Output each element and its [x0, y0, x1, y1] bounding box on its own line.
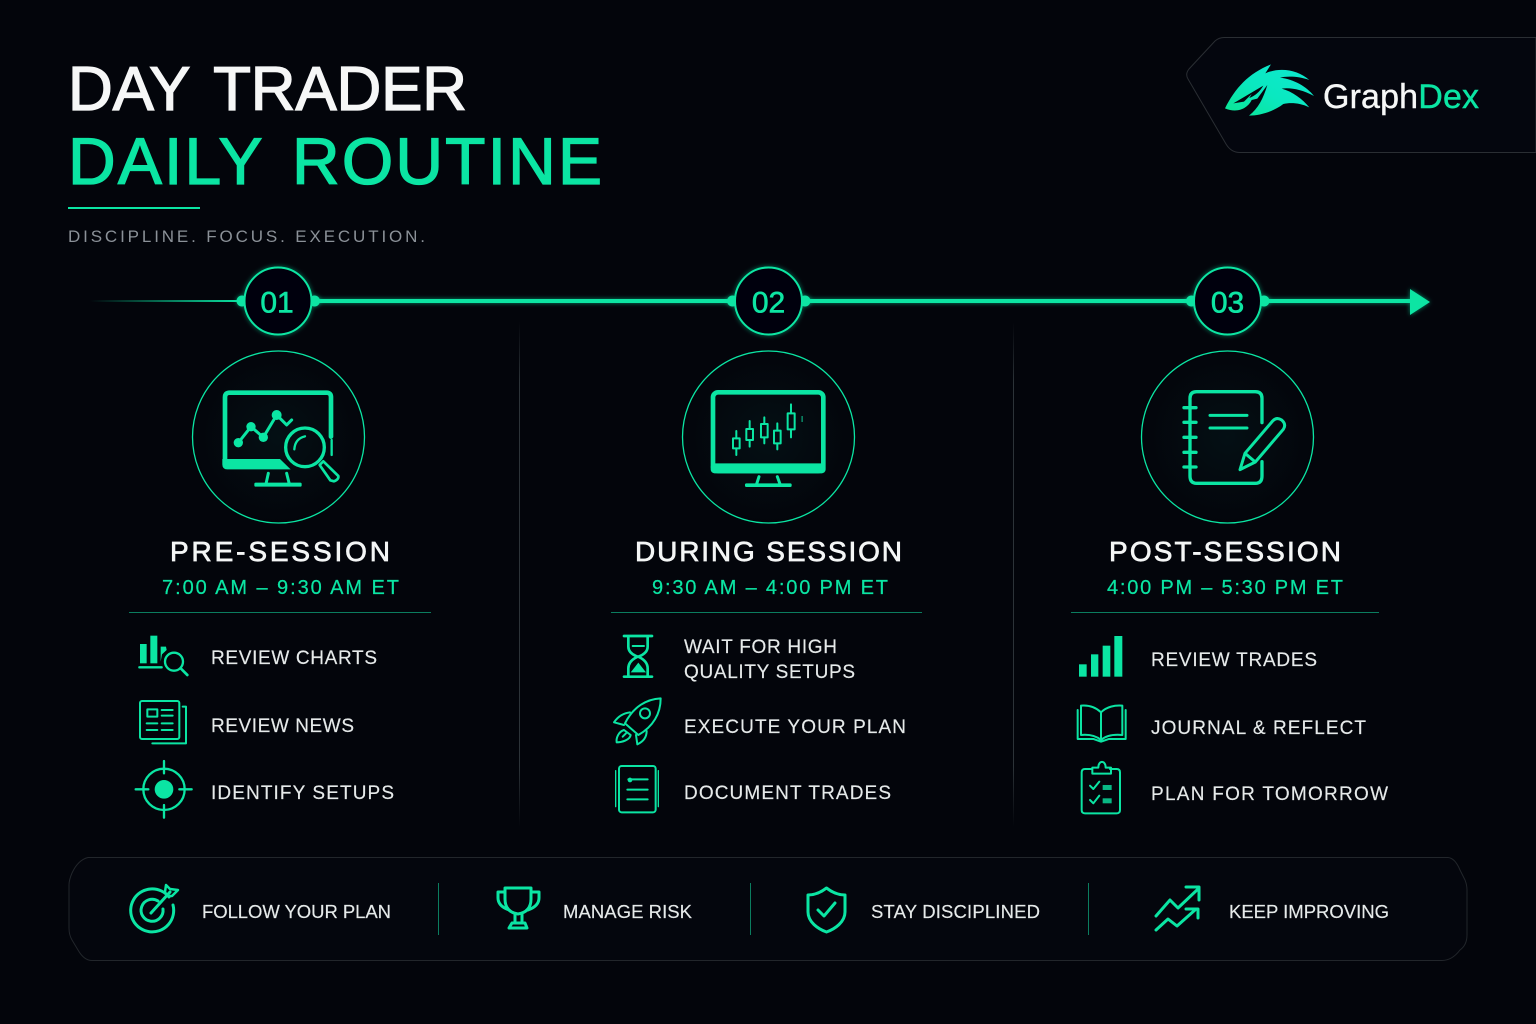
bottom principles bar — [69, 858, 1467, 960]
step 03: 03 — [1211, 286, 1244, 320]
icon: notebook with pencil — [1142, 351, 1314, 523]
timeline — [90, 268, 1430, 334]
item: review news — [140, 701, 354, 743]
principle: keep improving — [1156, 887, 1389, 930]
item: review trades — [1079, 636, 1317, 677]
panel: post-session — [1071, 351, 1388, 813]
item: journal and reflect: JOURNAL & REFLECT — [1151, 718, 1366, 739]
arrow head — [1410, 289, 1430, 315]
principle: follow your plan: FOLLOW YOUR PLAN — [202, 901, 391, 922]
title line 1: DAY TRADER — [68, 55, 467, 124]
item: identify setups: IDENTIFY SETUPS — [211, 783, 394, 804]
logo mark — [1225, 64, 1314, 116]
item: document trades: DOCUMENT TRADES — [684, 783, 891, 804]
principle: keep improving: KEEP IMPROVING — [1229, 901, 1389, 922]
heading: POST-SESSION — [1109, 536, 1341, 567]
item: document trades — [616, 766, 891, 812]
item: journal and reflect — [1078, 706, 1366, 742]
principle: manage risk: MANAGE RISK — [563, 901, 693, 922]
heading: DURING SESSION — [635, 536, 902, 567]
item: execute your plan — [614, 698, 906, 744]
principle: stay disciplined: STAY DISCIPLINED — [871, 901, 1040, 922]
item: review news: REVIEW NEWS — [211, 716, 354, 737]
item: plan for tomorrow — [1082, 762, 1388, 813]
heading: PRE-SESSION — [170, 536, 390, 567]
panel: during session — [611, 351, 922, 812]
principle: follow your plan — [131, 885, 391, 932]
principle: manage risk — [498, 888, 693, 928]
item: wait for setups: WAIT FOR HIGH — [684, 637, 837, 658]
time range: 7:00 AM – 9:30 AM ET — [162, 577, 399, 599]
item: identify setups — [136, 761, 394, 818]
icon: monitor with candlesticks — [682, 351, 854, 523]
time range: 9:30 AM – 4:00 PM ET — [652, 577, 888, 599]
step 02 — [727, 268, 810, 334]
logo wordmark: GraphDex — [1323, 78, 1479, 116]
item: execute your plan: EXECUTE YOUR PLAN — [684, 717, 906, 738]
item: review charts: REVIEW CHARTS — [211, 648, 377, 669]
logo badge — [1187, 38, 1536, 152]
item: review trades: REVIEW TRADES — [1151, 650, 1317, 671]
title — [68, 55, 602, 198]
item: wait for setups: QUALITY SETUPS — [684, 662, 855, 683]
item: plan for tomorrow: PLAN FOR TOMORROW — [1151, 784, 1388, 805]
step 03 — [1186, 268, 1270, 334]
item: wait for setups — [624, 636, 855, 683]
item: review charts — [139, 636, 377, 675]
step 01 — [236, 268, 320, 334]
panel: pre-session — [129, 351, 431, 818]
icon: monitor with magnifier — [192, 351, 364, 523]
principle: stay disciplined — [808, 888, 1040, 932]
step 02: 02 — [752, 286, 785, 320]
tagline: DISCIPLINE. FOCUS. EXECUTION. — [68, 227, 425, 246]
step 01: 01 — [260, 286, 294, 320]
time range: 4:00 PM – 5:30 PM ET — [1107, 577, 1343, 599]
title line 2: DAILY ROUTINE — [68, 124, 602, 198]
